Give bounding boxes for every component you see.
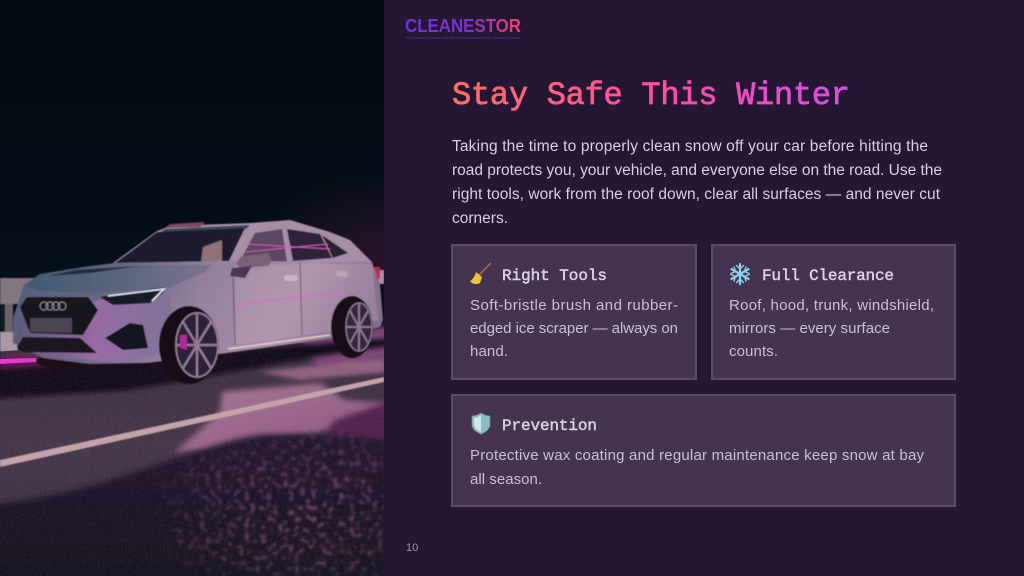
card text: prevention: Protective wax coating and regular maintenance keep snow at bay: [470, 447, 924, 464]
intro paragraph: [452, 138, 942, 227]
heading: right tools: Right Tools: [502, 267, 607, 285]
icon: shield: [472, 413, 490, 434]
car: [13, 220, 383, 384]
lower intake: [17, 337, 97, 353]
card text: full clearance: Roof, hood, trunk, windshield,: [729, 297, 934, 314]
card text: right tools: [470, 297, 678, 360]
body: [13, 261, 383, 364]
white road line: [0, 377, 384, 467]
rear wheel: [331, 296, 373, 358]
card text: right tools: Soft-bristle brush and rubber-: [470, 297, 678, 314]
page number: 10: [406, 542, 418, 554]
icon: broom: [470, 263, 491, 284]
intro paragraph: corners.: [452, 210, 508, 227]
hood: [24, 265, 212, 293]
heading: prevention: Prevention: [502, 417, 597, 435]
card text: full clearance: counts.: [729, 343, 778, 360]
pink neon strip: [0, 358, 36, 364]
lower front bumper: [15, 296, 178, 362]
logo: Cleanestor: Pro Cleaning Guides And Service Journalism From Cleaning Nestors: [406, 36, 520, 40]
heading: full clearance: Full Clearance: [762, 267, 894, 285]
intro paragraph: road protects you, your vehicle, and everyone else on the road. Use the: [452, 162, 942, 179]
guard rail: [0, 270, 384, 356]
front grille: [20, 297, 98, 335]
front wheel: [159, 306, 219, 384]
panel: full clearance: [712, 245, 955, 379]
door handles: [284, 275, 298, 281]
headlight: [100, 287, 165, 305]
road grain: [0, 352, 384, 576]
title: Stay Safe This Winter: [452, 77, 850, 114]
card text: full clearance: [729, 297, 934, 360]
card text: prevention: all season.: [470, 471, 542, 488]
front tyre under the bumper: [36, 356, 86, 369]
logo: Cleanestor: CLEANESTOR: [405, 16, 521, 36]
road surface: [0, 322, 384, 506]
card text: right tools: hand.: [470, 343, 508, 360]
side highlights: [235, 264, 378, 345]
icon: snowflake: [731, 264, 749, 284]
card text: right tools: edged ice scraper — always on: [470, 320, 678, 337]
road shadow with pink reflections: [0, 400, 404, 576]
panel: prevention: [452, 395, 955, 506]
card text: prevention: [470, 447, 924, 488]
intro paragraph: Taking the time to properly clean snow off your car before hitting the: [452, 138, 928, 155]
taillight: [374, 267, 380, 278]
mirror: [236, 253, 272, 268]
intro paragraph: right tools, work from the roof down, clear all surfaces — and never cut: [452, 186, 941, 203]
roof and glass: [113, 220, 372, 263]
panel: right tools: [452, 245, 696, 379]
card text: full clearance: mirrors — every surface: [729, 320, 890, 337]
photo: car on a winter road at night: [0, 0, 404, 576]
